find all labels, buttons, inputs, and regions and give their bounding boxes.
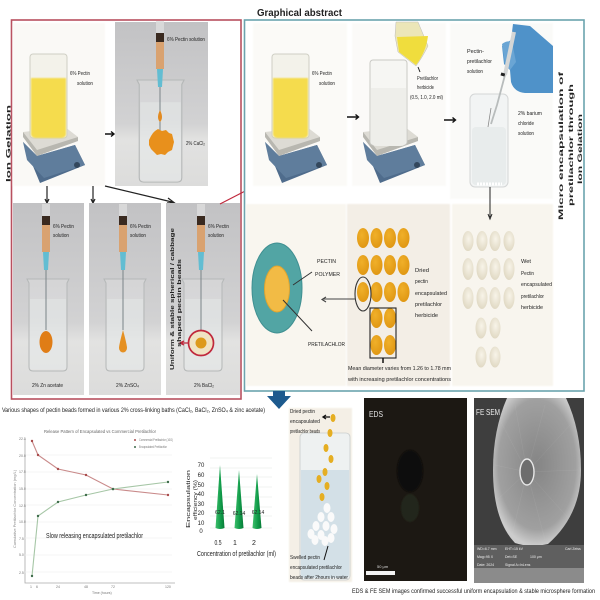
line chart: release pattern: 6 <box>36 585 38 589</box>
panel: dried beads: herbicide <box>415 313 438 319</box>
bar chart: encapsulation efficiency: 60 <box>198 473 205 479</box>
bar chart: encapsulation efficiency: 30 <box>198 502 205 508</box>
arrow: step 1 to 2 <box>347 114 358 120</box>
arrow: blue down <box>267 391 291 409</box>
label: micro encapsulation <box>558 70 584 220</box>
bar chart: encapsulation efficiency: 70 <box>198 463 205 469</box>
line chart: release pattern: Slow releasing encapsulated pretilachlor <box>46 533 144 540</box>
bar chart: encapsulation efficiency: 20 <box>198 511 205 517</box>
photo: zinc acetate: solution <box>53 233 69 239</box>
bar chart: encapsulation efficiency: 0.5 <box>214 540 222 547</box>
image: FE-SEM micrograph: WD=6.7 mm <box>477 547 497 551</box>
line chart: release pattern: 2.5 <box>19 571 24 575</box>
photo: barium chloride: solution <box>208 233 224 239</box>
photo: beads dropping in water: encapsulated <box>290 419 320 425</box>
line chart: release pattern: Cumulative Pretilachlor Concentration (mg/L) <box>13 470 17 548</box>
label: micro encapsulation: Micro encapsulation of <box>558 70 565 220</box>
photo: pectin solution on stirrer: 6% Pectin <box>70 71 90 77</box>
image: FE-SEM micrograph: Date: 2024 <box>477 563 494 567</box>
bar chart: encapsulation efficiency: 40 <box>198 492 205 498</box>
diagram: bead cross-section: PRETILACHLOR <box>308 342 345 348</box>
photo: beads dropping in water: beads after 2hours in water <box>290 575 348 581</box>
panel: dried beads: encapsulated <box>415 291 447 297</box>
image: EDS map: 50 μm <box>377 564 389 569</box>
panel: dried beads: Mean diameter varies from 1.26 to 1.78 mm <box>348 366 451 372</box>
panel: wet beads: encapsulated <box>521 282 552 288</box>
line chart: release pattern: 20.0 <box>19 454 26 458</box>
arrow: red link between panels <box>220 187 253 204</box>
photo: barium chloride: 2% BaCl₂ <box>194 383 214 389</box>
image: EDS map <box>364 398 467 581</box>
photo: beads dropping in water: encapsulated pretilachlor <box>290 565 342 571</box>
image: FE-SEM micrograph: Mag=95 X <box>477 555 494 559</box>
line chart: release pattern: Time (hours) <box>92 591 112 595</box>
bar chart: encapsulation efficiency <box>186 458 276 558</box>
line chart: release pattern: 22.5 <box>19 437 26 441</box>
photo: beads dropping in water: pretilachlor beads <box>290 429 320 435</box>
bar chart: encapsulation efficiency: 10 <box>198 521 205 527</box>
diagram: bead cross-section: PECTIN <box>317 259 336 265</box>
photo: zinc acetate: 6% Pectin <box>53 224 74 230</box>
photo: herbicide addition: (0.5, 1.0, 2.0 ml) <box>410 95 443 101</box>
line chart: release pattern: 24 <box>56 585 60 589</box>
line chart: release pattern: 72 <box>111 585 115 589</box>
photo: barium chloride: 6% Pectin <box>208 224 229 230</box>
bar chart: encapsulation efficiency: 2 <box>252 540 256 547</box>
image: FE-SEM micrograph: Signal A=InLens <box>505 563 531 567</box>
photo: zinc acetate <box>13 203 84 395</box>
arrows: to lower photos <box>45 186 174 203</box>
image: FE-SEM micrograph <box>474 398 584 583</box>
photo: beads dropping in water: Dried pectin <box>290 409 315 415</box>
photo: gloved hand with syringe: solution <box>518 131 534 137</box>
panel: wet beads: pretilachlor <box>521 294 544 300</box>
caption: pectin beads: Various shapes of pectin beads formed in various 2% cross-linking baths (CaCl₂, BaCl₂, ZnSO₄ & zinc acetate) <box>2 407 265 414</box>
panel: dried beads <box>322 204 451 386</box>
photo: gloved hand with syringe: pretilachlor <box>467 59 492 65</box>
panel: wet beads <box>452 204 553 386</box>
bar chart: encapsulation efficiency: 62.14 <box>233 511 245 517</box>
image: FE-SEM micrograph: EHT=15 kV <box>505 547 524 551</box>
line chart: release pattern: 12.5 <box>19 504 26 508</box>
photo: herbicide addition: Pretilachlor <box>417 76 438 82</box>
image: FE-SEM micrograph: FE SEM <box>476 408 500 417</box>
line chart: release pattern <box>13 429 175 595</box>
photo: gloved hand with syringe <box>450 23 553 199</box>
line chart: release pattern: 15.0 <box>19 487 26 491</box>
panel: dried beads: pectin <box>415 279 428 285</box>
arrow: step 3 down <box>488 187 492 219</box>
line chart: release pattern: 120 <box>165 585 171 589</box>
image: FE-SEM micrograph: Det=SE <box>505 555 518 559</box>
photo: herbicide addition: herbicide <box>417 85 434 91</box>
photo: gloved hand with syringe: solution <box>467 69 483 75</box>
photo: beads dropping in water <box>289 408 352 582</box>
line chart: release pattern: Encapsulated Pretilachlor <box>139 445 168 449</box>
panel: wet beads: herbicide <box>521 305 543 311</box>
diagram: bead cross-section: POLYMER <box>315 272 340 278</box>
diagram: bead cross-section <box>246 204 346 386</box>
label: micro encapsulation: pretilachlor through <box>568 84 575 206</box>
photo: gloved hand with syringe: Pectin- <box>467 49 484 55</box>
photo: CaCl2 bath: 6% Pectin solution <box>167 37 205 43</box>
photo: pectin solution: 6% Pectin <box>312 71 332 77</box>
line chart: release pattern: 17.5 <box>19 470 26 474</box>
label: micro encapsulation: Ion Gelation <box>577 114 584 184</box>
panel: micro encapsulation <box>244 20 584 391</box>
photo: pectin solution <box>253 23 347 186</box>
panel: wet beads: Pectin <box>521 271 534 277</box>
image: EDS map: EDS <box>369 410 383 419</box>
line chart: release pattern: 7.5 <box>19 537 24 541</box>
line chart: release pattern: 48 <box>84 585 88 589</box>
photo: barium chloride: shaped pectin beads <box>177 259 183 347</box>
arrow: step 2 to 3 <box>444 118 456 122</box>
photo: barium chloride: Uniform & stable spherical / cabbage <box>170 228 176 370</box>
photo: zinc sulfate: 2% ZnSO₄ <box>116 383 140 389</box>
panel: ion gelation <box>6 20 241 399</box>
label: ion gelation: Ion Gelation <box>6 105 12 182</box>
photo: CaCl2 bath <box>115 21 208 186</box>
bar chart: encapsulation efficiency: 1 <box>233 540 237 547</box>
bar chart: encapsulation efficiency: 62.14 <box>252 510 264 516</box>
title: Graphical abstract <box>257 7 342 19</box>
photo: pectin solution on stirrer: solution <box>77 81 93 87</box>
panel: wet beads: Wet <box>521 259 531 265</box>
bar chart: encapsulation efficiency: efficiency (%) <box>193 480 199 520</box>
line chart: release pattern: 5.0 <box>19 553 24 557</box>
photo: pectin solution on stirrer <box>13 23 105 186</box>
photo: gloved hand with syringe: chloride <box>518 121 534 127</box>
photo: gloved hand with syringe: 2% barium <box>518 111 542 117</box>
line chart: release pattern: Commercial Pretilachlor (10G) <box>139 438 173 442</box>
arrow: to CaCl2 <box>105 132 114 136</box>
bar chart: encapsulation efficiency: 62.1 <box>215 510 225 516</box>
photo: herbicide addition <box>352 22 446 186</box>
photo: zinc sulfate: 6% Pectin <box>130 224 151 230</box>
image: FE-SEM micrograph: Carl Zeiss <box>565 547 581 551</box>
photo: CaCl2 bath: 2% CaCl₂ <box>186 141 205 147</box>
bar chart: encapsulation efficiency: Concentration of pretilachlor (ml) <box>197 549 276 558</box>
photo: zinc sulfate <box>89 203 161 395</box>
image: FE-SEM micrograph: 100 μm <box>530 555 542 559</box>
photo: zinc acetate: 2% Zn acetate <box>32 383 63 389</box>
line chart: release pattern: 1 <box>30 585 32 589</box>
panel: dried beads: Dried <box>415 268 429 274</box>
photo: beads dropping in water: Swelled pectin <box>290 555 320 561</box>
panel: dried beads: with increasing pretilachlor concentrations <box>347 377 451 383</box>
photo: zinc sulfate: solution <box>130 233 146 239</box>
line chart: release pattern: 10.0 <box>19 520 26 524</box>
bar chart: encapsulation efficiency: 50 <box>198 483 205 489</box>
photo: pectin solution: solution <box>319 81 335 87</box>
panel: dried beads: pretilachlor <box>415 302 442 308</box>
bar chart: encapsulation efficiency: 0 <box>199 529 203 535</box>
photo: barium chloride <box>166 203 240 395</box>
bar chart: encapsulation efficiency: Encapsulation <box>186 470 192 528</box>
line chart: release pattern: Release Pattern of Encapsulated vs Commercial Pretilachlor <box>44 429 156 434</box>
